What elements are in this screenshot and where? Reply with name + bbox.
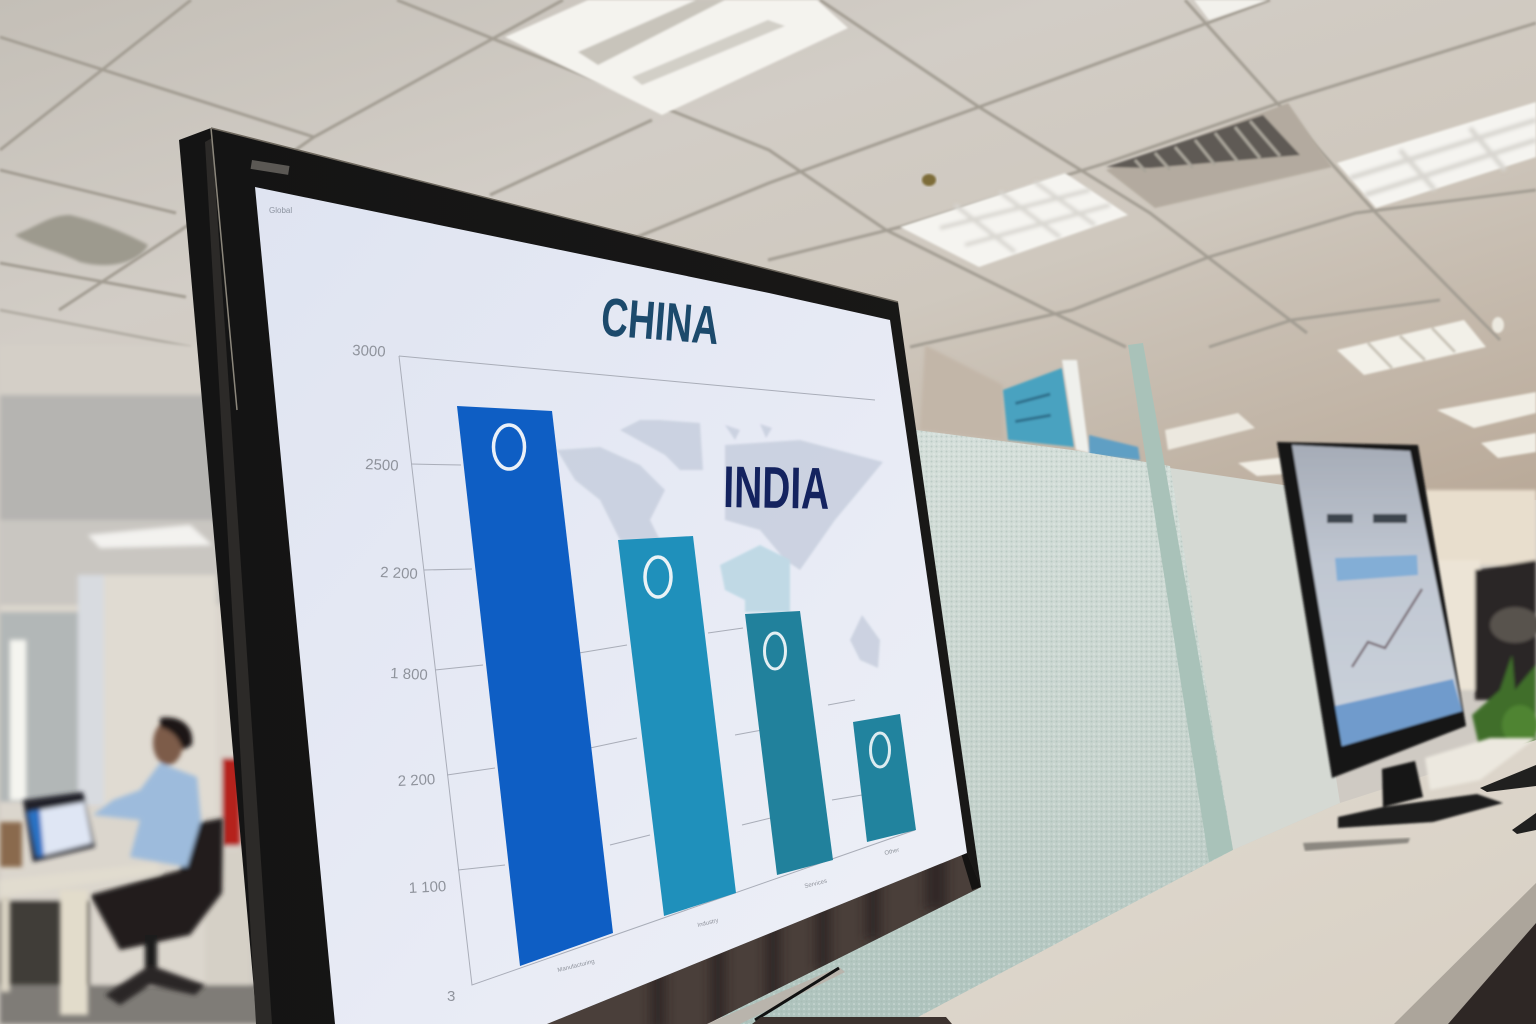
screen <box>1292 445 1462 746</box>
shirt <box>93 763 201 867</box>
x axis labels: Services <box>804 879 828 890</box>
bezel side strip <box>205 138 272 1024</box>
ceiling sensor <box>922 174 936 186</box>
chart corner label: Global <box>269 206 292 215</box>
partition second panel <box>1170 468 1340 850</box>
y axis labels: 2500 <box>365 456 399 475</box>
bar: second <box>618 536 736 916</box>
light two <box>900 173 1128 267</box>
brand label <box>251 160 290 175</box>
water stain <box>15 215 148 265</box>
screen footer <box>1335 679 1462 746</box>
y axis labels: 2 200 <box>380 564 418 583</box>
heading: China: CHINA <box>599 286 721 356</box>
plant <box>1472 655 1536 750</box>
y axis labels <box>352 342 455 1005</box>
blurred headings <box>1327 514 1407 523</box>
blue signage <box>1003 360 1140 460</box>
marker ring <box>494 425 524 469</box>
small monitor right <box>1277 442 1503 828</box>
y axis labels: 3000 <box>352 342 386 361</box>
person at desk <box>0 717 223 1015</box>
laptop screen <box>28 802 92 857</box>
x axis labels <box>557 847 900 974</box>
desk surface <box>0 863 160 897</box>
background right <box>1420 490 1536 750</box>
bar: first <box>457 406 613 966</box>
laptop <box>23 792 95 862</box>
air vent <box>1106 103 1332 208</box>
bezel highlight <box>211 128 237 410</box>
blue banner <box>1335 555 1418 581</box>
hair <box>160 717 192 750</box>
desk leg <box>60 890 88 1015</box>
world map <box>557 420 883 668</box>
screen <box>255 187 967 1024</box>
y axis labels: 3 <box>447 988 455 1005</box>
frame <box>1277 442 1466 778</box>
main monitor <box>179 128 981 1024</box>
head <box>153 721 183 765</box>
x axis labels: Manufacturing <box>557 959 595 974</box>
office chair <box>90 818 223 1005</box>
bezel <box>179 128 981 1024</box>
base <box>1338 794 1503 828</box>
partition frosted panel <box>720 428 1233 1024</box>
blurred back office left <box>0 345 260 1024</box>
pen on desk <box>1303 838 1410 851</box>
light one <box>505 0 848 115</box>
glass upright <box>1128 343 1233 862</box>
main monitor stand <box>707 967 952 1024</box>
line chart <box>1352 589 1422 667</box>
ceiling <box>0 0 1536 500</box>
heading: India: INDIA <box>723 454 830 522</box>
bezel lower reflection <box>547 850 981 1024</box>
desk <box>905 738 1536 1024</box>
marker ring <box>645 557 671 597</box>
marker ring <box>870 733 890 767</box>
tablet <box>1480 765 1536 792</box>
x axis labels: Industry <box>697 918 719 929</box>
bar: fourth <box>853 714 916 842</box>
stand <box>1382 761 1423 807</box>
bar: third <box>745 611 833 875</box>
ceiling light panels <box>505 0 1536 476</box>
tablet second <box>1512 813 1536 834</box>
y axis labels: 2 200 <box>397 771 436 790</box>
x axis labels: Other <box>884 847 900 857</box>
light three <box>1337 102 1536 208</box>
y axis labels: 1 800 <box>390 665 428 684</box>
y axis labels: 1 100 <box>408 878 447 897</box>
wall behind signage <box>920 345 1003 440</box>
marker ring <box>764 633 786 669</box>
chart gridlines <box>399 356 915 985</box>
